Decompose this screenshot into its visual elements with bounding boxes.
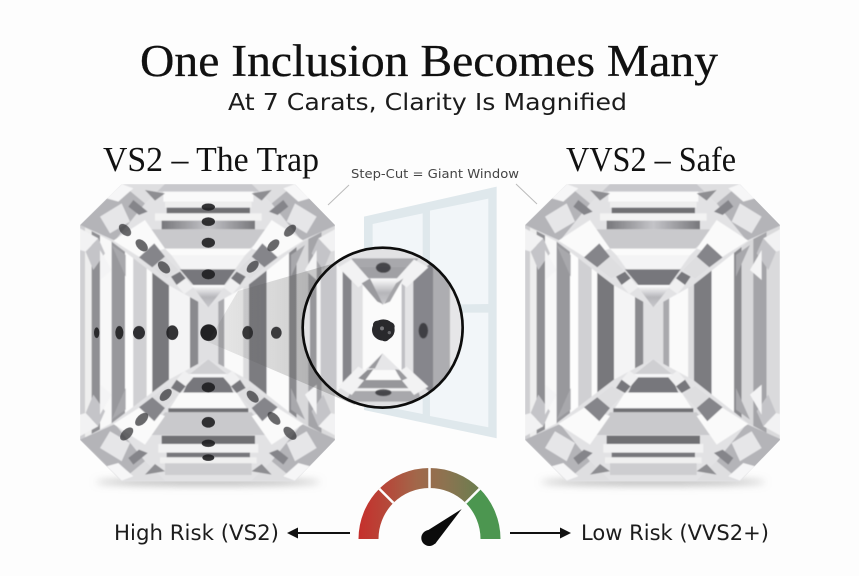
- magnified facets: [303, 247, 463, 410]
- blurred inclusions: [375, 263, 428, 396]
- gauge segment: orange: [379, 468, 430, 503]
- gauge needle: [421, 509, 462, 546]
- arrow: right: [510, 528, 571, 538]
- arrow: left: [287, 528, 350, 538]
- label: low risk: Low Risk (VVS2+): [581, 521, 769, 545]
- subtitle: At 7 Carats, Clarity Is Magnified: [228, 90, 627, 116]
- gauge: [358, 468, 500, 546]
- gauge segment: olive: [430, 468, 480, 503]
- callout: step-cut window: Step-Cut = Giant Window: [351, 166, 519, 181]
- window panes: [373, 199, 488, 427]
- heading: VS2: VS2 – The Trap: [103, 140, 319, 179]
- inclusion blob: [372, 319, 395, 341]
- gauge segment: red: [358, 489, 393, 539]
- label: high risk: High Risk (VS2): [114, 521, 279, 545]
- heading: VVS2: VVS2 – Safe: [566, 140, 736, 179]
- callout: step-cut window: [328, 166, 537, 205]
- diamond: VVS2 clean: [525, 184, 782, 485]
- inclusion dots: [94, 203, 299, 461]
- title: One Inclusion Becomes Many: [140, 36, 719, 86]
- diamond: VS2 with inclusions: [80, 184, 337, 485]
- magnifier lens: [303, 247, 463, 410]
- icon: window: [364, 187, 497, 438]
- magnification beam: [208, 263, 355, 405]
- gauge segment: green: [466, 489, 500, 539]
